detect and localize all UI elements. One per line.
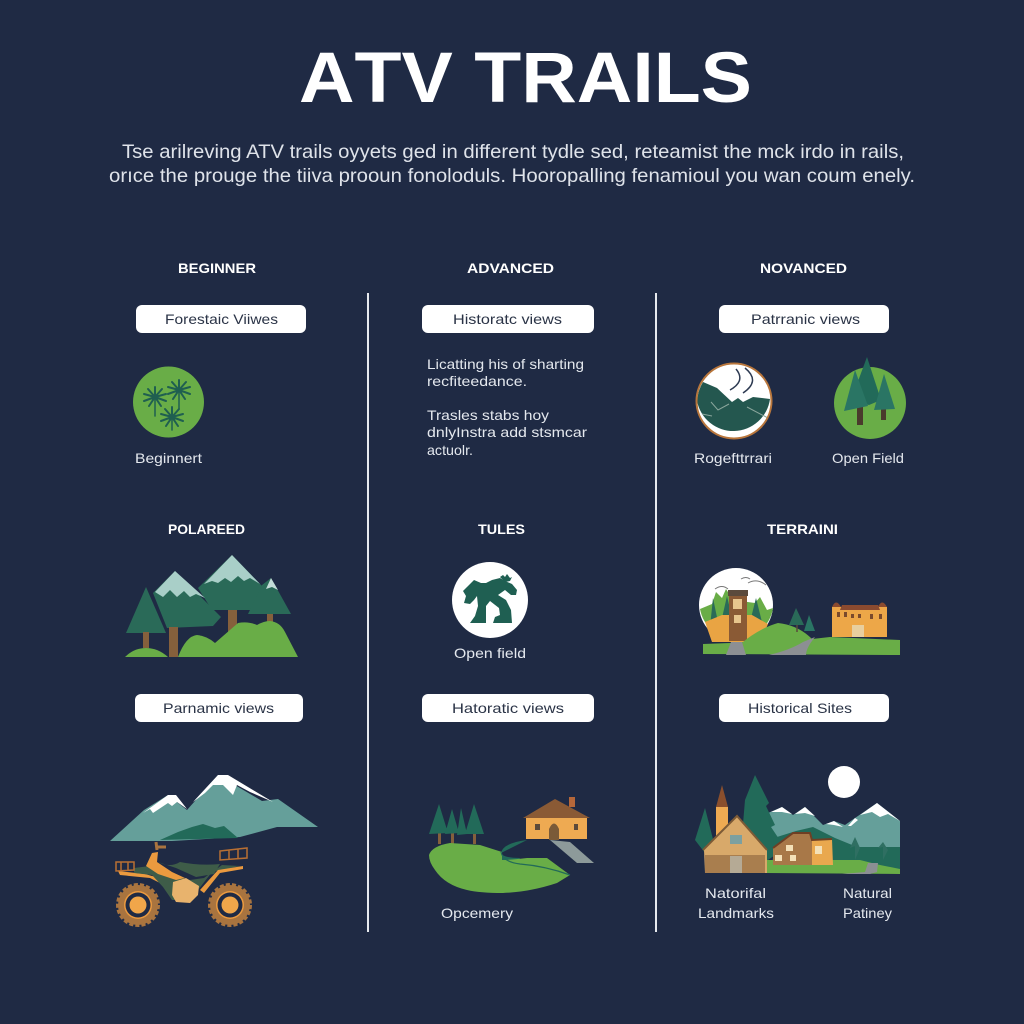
pill: patrranic views: Patrranic views [751,311,860,327]
intro text: Tse arilreving ATV trails oyyets ged in different tydle sed, reteamist the mck irdo in rails, [122,141,904,163]
pill: historical sites: Historical Sites [748,700,852,716]
illustration: mountains and trees [125,555,298,657]
text block: advanced description: actuolr. [427,442,473,458]
heading: polareed: POLAREED [168,521,245,537]
pill: historatc views [422,305,594,333]
pill: forestaic views: Forestaic Viiwes [165,311,278,327]
heading: novanced: NOVANCED [760,260,847,276]
pill: historatc views: Historatc views [453,311,562,327]
intro text [109,141,915,187]
mountains [110,775,318,841]
heading: beginner: BEGINNER [178,260,256,276]
intro text: orıce the prouge the tiiva prooun fonoloduls. Hooropalling fenamioul you wan coum enely. [109,165,915,187]
pill: hatoratic views [422,694,594,722]
label: natorifal landmarks [698,885,774,921]
pill: patrranic views [719,305,889,333]
label: open field: Open Field [832,450,904,466]
title: ATV TRAILS [299,39,752,118]
icon: green circle with palm trees [133,366,204,438]
text block: advanced description: Trasles stabs hoy [427,407,549,423]
label: natorifal landmarks: Natorifal [705,885,766,901]
label: natural patiney: Natural [843,885,892,901]
illustration: castle, hills and manor [699,568,900,655]
text block: advanced description: recfiteedance. [427,373,527,389]
illustration: house on green hill [429,797,594,893]
heading: tules: TULES [478,521,525,537]
heading: terraini: TERRAINI [767,521,838,537]
illustration: mountain range with ATV [110,775,318,925]
pill: forestaic views [136,305,306,333]
illustration: moon and village with mountains [695,766,900,874]
label: opcemery: Opcemery [441,905,513,921]
ATV [116,842,250,925]
label: beginnert: Beginnert [135,450,202,466]
pill: historical sites [719,694,889,722]
label: open field: Open field [454,645,526,661]
icon: green circle with pine trees [834,357,906,439]
icon: white circle with hulking figure [452,562,528,638]
text block: advanced description: Licatting his of sharting [427,356,584,372]
pill: parnamic views [135,694,303,722]
text block: advanced description: dnlyInstra add stsmcar [427,424,587,440]
label: natorifal landmarks: Landmarks [698,905,774,921]
heading: advanced: ADVANCED [467,260,554,276]
icon: rough terrain circle [696,364,772,438]
pill: hatoratic views: Hatoratic views [452,700,564,716]
label: natural patiney [843,885,892,921]
label: natural patiney: Patiney [843,905,892,921]
text block: advanced description [427,356,587,458]
label: rogefttrrari: Rogefttrrari [694,450,772,466]
pill: parnamic views: Parnamic views [163,700,274,716]
